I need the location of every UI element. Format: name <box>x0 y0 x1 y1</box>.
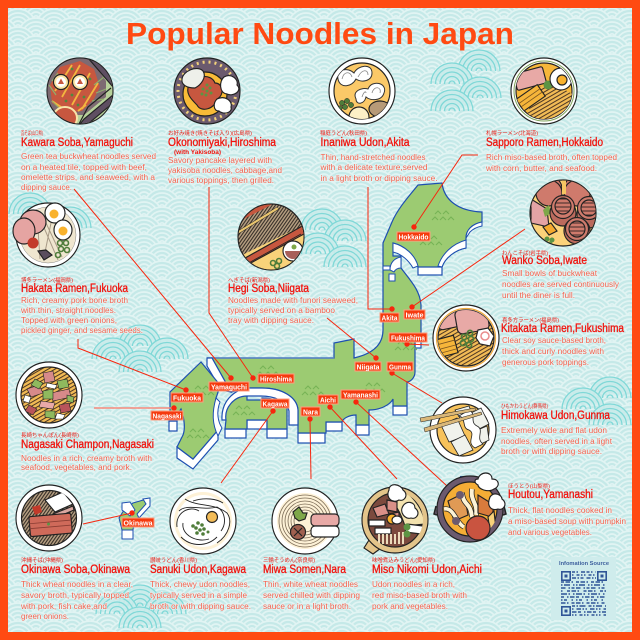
leader: Inaniwa to Akita <box>368 187 394 311</box>
description <box>263 579 360 611</box>
description: a miso-based soup with pumpkin <box>508 516 626 526</box>
icon: inaniwa udon <box>329 58 395 127</box>
leader: Hegi to Niigata <box>327 318 378 360</box>
map: extruded white coast blocks <box>169 266 442 469</box>
label: Hiroshima: Hiroshima <box>260 374 293 384</box>
description: noodles, often served in a light <box>501 436 613 446</box>
label: Yamaguchi: Yamaguchi <box>211 382 247 392</box>
panel: Sanuki Udon <box>150 488 251 611</box>
panel: Miso Nikomi Udon <box>362 485 482 611</box>
place name in Japanese: ひもかわうどん(群馬県) <box>501 402 548 410</box>
leader: Kawara Soba to Yamaguchi <box>74 189 233 380</box>
icon: kitakata ramen <box>433 301 499 371</box>
source caption: Infomation Source <box>559 561 609 567</box>
panel: Miwa Somen <box>263 488 360 611</box>
panel: Hakata Ramen <box>13 203 143 335</box>
icon: miso nikomi udon <box>362 485 428 554</box>
label: Hokkaido: Hokkaido <box>398 232 429 242</box>
description: served chilled with dipping <box>263 590 360 600</box>
leader: Kitakata to Fukushima <box>405 342 429 346</box>
description: Small bowls of buckwheat <box>502 268 598 278</box>
description <box>502 335 606 367</box>
leader: Okonomiyaki to Hiroshima <box>209 187 255 380</box>
panel: Houtou <box>434 473 626 542</box>
heading: Inaniwa Udon,Akita <box>320 137 410 149</box>
description <box>20 295 143 335</box>
description: Rich, creamy pork bone broth <box>21 295 128 305</box>
leader: Champon to Nagasaki <box>94 406 176 410</box>
leader: Hakata to Fukuoka <box>78 339 188 392</box>
panel: Wanko Soba <box>502 176 620 300</box>
map: Tsugaru strait white channels <box>383 222 482 281</box>
description <box>150 579 251 611</box>
leader: Houtou to Yamanashi <box>354 400 447 486</box>
description <box>228 295 358 325</box>
description: Thin, hand-stretched noodles <box>320 152 426 162</box>
place name in Japanese: 喜多方ラーメン(福島県) <box>502 316 559 324</box>
description: savory broth, typically topped <box>21 590 129 600</box>
leader: Okinawa Soba to Okinawa <box>83 511 134 524</box>
information source panel <box>551 557 616 620</box>
description: yakisoba noodles, cabbage,and <box>168 165 282 175</box>
panel: Okonomiyaki <box>168 58 282 185</box>
panel: Kawara Soba <box>21 58 156 192</box>
place name in Japanese: 味噌煮込みうどん(愛知県) <box>372 556 435 564</box>
label: Iwate: Iwate <box>406 310 424 320</box>
map: Kyushu <box>170 362 220 459</box>
label: Fukuoka: Fukuoka <box>173 394 202 402</box>
description <box>21 453 152 472</box>
description: pork and vegetables. <box>372 601 448 611</box>
description: thick and curly noodles with <box>502 346 604 356</box>
label: Fukushima: Fukushima <box>391 334 426 342</box>
panel: Kitakata Ramen <box>433 301 625 371</box>
description: Thick, chewy udon noodles, <box>150 579 250 589</box>
sub-heading: (with Yakisoba) <box>174 150 221 156</box>
title: Popular Noodles in Japan <box>126 16 514 51</box>
label: Nagasaki: Nagasaki <box>152 412 182 420</box>
description: pickled ginger, and sesame seeds. <box>21 325 143 335</box>
icon: sanuki udon <box>170 488 236 554</box>
leader: Wanko to Iwate <box>410 229 525 309</box>
place name in Japanese: 讃岐うどん(香川県) <box>150 556 197 564</box>
heading: Sanuki Udon,Kagawa <box>150 564 247 576</box>
description: broth or with dipping sauce. <box>501 446 602 456</box>
leader: Sanuki to Kagawa <box>221 409 275 483</box>
QR code <box>561 572 606 615</box>
description <box>168 155 282 185</box>
description: Udon noodles in a rich, <box>372 579 455 589</box>
description <box>485 152 617 173</box>
description: seafood, vegetables, and pork. <box>21 462 132 472</box>
description: various toppings, then grilled. <box>168 175 274 185</box>
map: Kyushu ribbon <box>213 398 222 436</box>
description: and various vegetables. <box>508 527 592 537</box>
place name in Japanese: 瓦そば(山口県) <box>21 129 43 137</box>
icon: miwa somen <box>272 488 339 554</box>
leader: Miso Nikomi to Aichi <box>328 405 397 479</box>
panel: Himokawa Udon <box>420 397 613 463</box>
description <box>508 505 626 537</box>
place name in Japanese: わんこそば(岩手県) <box>502 249 548 257</box>
description: Thin, white wheat noodles <box>263 579 358 589</box>
icon: wanko soba <box>530 176 601 246</box>
panel: Okinawa Soba <box>16 485 133 621</box>
description: Extremely wide and flat udon <box>501 425 607 435</box>
map: Honshu and Hokkaido <box>212 183 482 433</box>
label: Niigata: Niigata <box>356 362 380 372</box>
description <box>501 425 613 456</box>
heading: Nagasaki Champon,Nagasaki <box>21 439 154 451</box>
panel: Inaniwa Udon <box>320 58 438 183</box>
place name in Japanese: 長崎ちゃんぽん(長崎県) <box>21 431 79 439</box>
leader: Sapporo to Hokkaido <box>412 155 478 229</box>
description: with a delicate texture,served <box>320 162 428 172</box>
description: with pork, fish cake,and <box>20 601 107 611</box>
label: Aichi: Aichi <box>320 396 336 404</box>
place name in Japanese: ほうとう(山梨県) <box>508 482 550 490</box>
description <box>372 579 467 611</box>
heading: Okinawa Soba,Okinawa <box>21 564 131 576</box>
map: Shikoku <box>225 396 287 429</box>
description: until the diner is full. <box>502 290 575 300</box>
map of Japan <box>74 155 525 539</box>
description: green onions. <box>21 611 69 621</box>
description: typically served in a simple <box>150 590 247 600</box>
label: Okinawa: Okinawa <box>124 518 153 528</box>
description: Thick, flat noodles cooked in <box>508 505 612 515</box>
place name in Japanese: 三輪そうめん(奈良県) <box>263 556 315 564</box>
description: broth or with dipping sauce. <box>150 601 251 611</box>
description: generous pork toppings. <box>502 357 589 367</box>
description <box>21 151 156 192</box>
description: sauce or in a light broth. <box>263 601 351 611</box>
map: top shadow line <box>207 357 334 359</box>
description: with thin, straight noodles. <box>20 305 116 315</box>
label: Gunma: Gunma <box>389 362 412 372</box>
label: Akita: Akita <box>382 314 398 322</box>
heading: Okonomiyaki,Hiroshima <box>168 137 277 149</box>
description: in a light broth or dipping sauce. <box>320 173 438 183</box>
description: omelette strips, and seaweed, with a <box>21 172 155 182</box>
icon: hegi soba <box>238 204 304 270</box>
description: typically served on a bamboo <box>228 305 335 315</box>
heading: Kitakata Ramen,Fukushima <box>501 323 625 335</box>
icon: kawara soba <box>47 58 113 129</box>
description: Topped with green onions, <box>21 315 117 325</box>
map: white inland sea ribbon <box>222 388 298 425</box>
description: on a heated tile, topped with beef, <box>21 162 147 172</box>
panel: Sapporo Ramen <box>485 58 617 173</box>
heading: Hegi Soba,Niigata <box>228 283 310 295</box>
heading: Himokawa Udon,Gunma <box>501 410 611 422</box>
description: dipping sauce. <box>21 182 72 192</box>
place name in Japanese: へぎそば(新潟県) <box>228 276 270 284</box>
heading: Houtou,Yamanashi <box>508 489 593 501</box>
place name in Japanese: 札幌ラーメン(北海道) <box>486 129 538 137</box>
map: Chugoku western white band <box>207 358 231 392</box>
place name in Japanese: 博多ラーメン(福岡県) <box>21 276 73 284</box>
map: mountain marks <box>187 211 454 438</box>
heading: Miwa Somen,Nara <box>263 564 347 576</box>
heading: Sapporo Ramen,Hokkaido <box>486 137 603 149</box>
leader: Himokawa to Gunma <box>390 371 442 403</box>
description <box>320 152 438 183</box>
label: Nara: Nara <box>303 408 319 416</box>
heading: Hakata Ramen,Fukuoka <box>21 283 129 295</box>
description: red miso-based broth with <box>372 590 467 600</box>
place name in Japanese: お好み焼き(焼きそば入り)(広島県) <box>168 129 252 137</box>
description: Clear soy sauce-based broth, <box>502 335 606 345</box>
icon: okonomiyaki <box>174 58 240 124</box>
panel: Nagasaki Champon <box>16 362 154 472</box>
description: Noodles made with funori seaweed, <box>228 295 358 305</box>
description <box>20 579 133 621</box>
icon: nagasaki champon <box>16 362 82 428</box>
icon: okinawa soba <box>16 485 82 551</box>
label: Kagawa: Kagawa <box>262 400 288 408</box>
description: noodles are served continuously <box>502 279 620 289</box>
place name in Japanese: 沖縄そば(沖縄県) <box>21 556 63 564</box>
icon: himokawa udon <box>420 397 496 463</box>
heading: Kawara Soba,Yamaguchi <box>21 137 133 149</box>
description: Rich miso-based broth, often topped <box>486 152 617 162</box>
description: Green tea buckwheat noodles served <box>21 151 156 161</box>
description: Noodles in a rich, creamy broth with <box>21 453 152 463</box>
map: Okinawa <box>119 498 150 539</box>
description: with corn, butter, and seafood. <box>485 163 597 173</box>
description: tray with dipping sauce. <box>228 315 314 325</box>
description: Thick wheat noodles in a clear, <box>21 579 133 589</box>
icon: houtou <box>434 473 506 542</box>
description: Savory pancake layered with <box>168 155 272 165</box>
leader: Miwa to Nara <box>308 417 312 479</box>
heading: Miso Nikomi Udon,Aichi <box>372 564 482 576</box>
heading: Wanko Soba,Iwate <box>502 255 587 267</box>
label: Yamanashi: Yamanashi <box>343 390 378 400</box>
icon: sapporo ramen <box>511 58 578 125</box>
icon: hakata ramen <box>13 203 80 267</box>
description <box>502 268 620 300</box>
panel: Hegi Soba <box>228 204 358 325</box>
place name in Japanese: 稲庭うどん(秋田県) <box>320 129 367 137</box>
